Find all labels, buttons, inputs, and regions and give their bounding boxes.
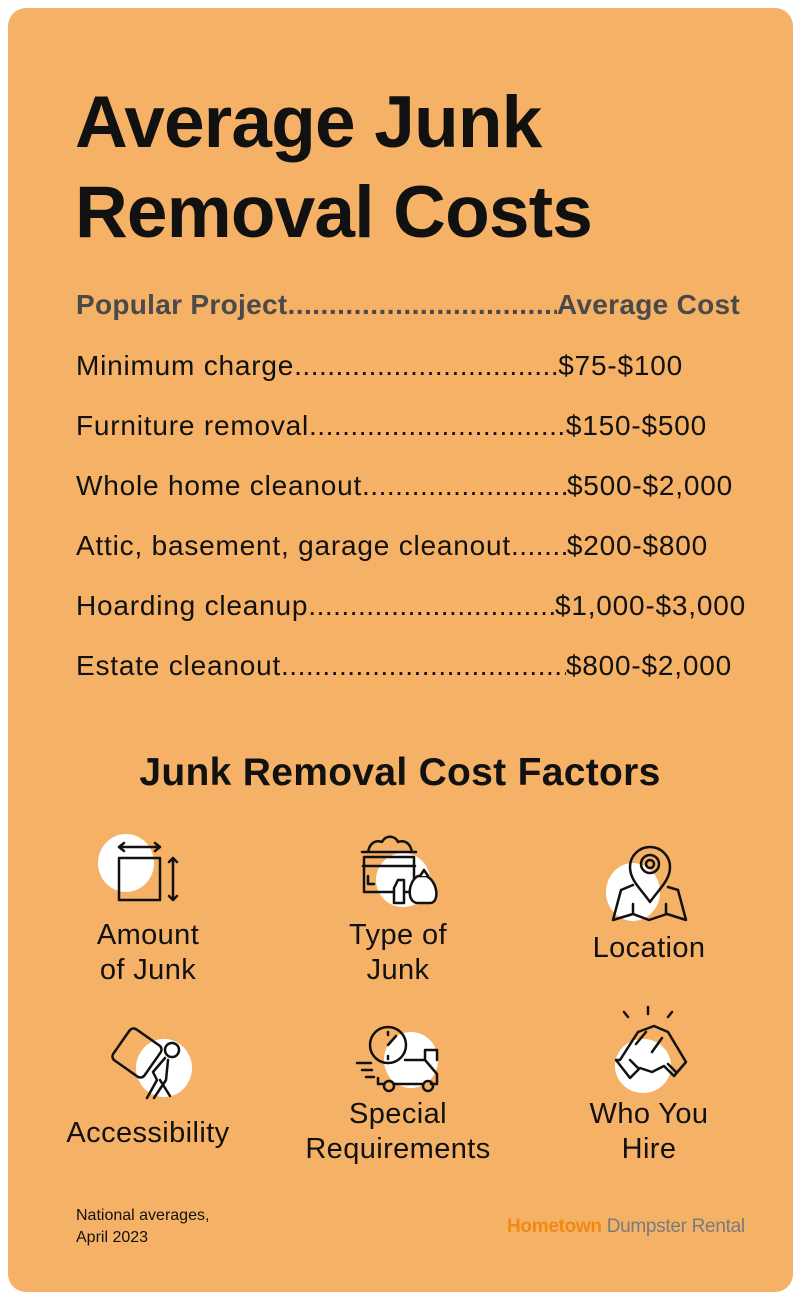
label: who you hire	[590, 1098, 708, 1165]
label: who you hire: Hire	[622, 1133, 676, 1165]
title: Average Junk	[75, 82, 541, 163]
label: location: Location	[593, 932, 705, 964]
label: type of junk: Type of	[349, 919, 447, 951]
label: accessibility: Accessibility	[66, 1117, 230, 1149]
row: furniture removal: Furniture removal	[76, 410, 309, 441]
label: special requirements: Requirements	[305, 1133, 491, 1165]
logo: Hometown Dumpster Rental	[507, 1216, 745, 1237]
label: amount of junk: of Junk	[100, 954, 196, 986]
section heading: Junk Removal Cost Factors	[139, 751, 661, 794]
row: estate: Estate cleanout	[76, 650, 281, 681]
label: amount of junk	[97, 919, 199, 986]
label: special requirements: Special	[349, 1098, 447, 1130]
label: special requirements	[305, 1098, 491, 1165]
row: estate: $800-$2,000	[566, 650, 732, 681]
table header: Popular Project	[76, 289, 287, 320]
label: type of junk: Junk	[367, 954, 429, 986]
icon: amount	[98, 834, 177, 900]
row: hoarding: Hoarding cleanup	[76, 590, 308, 621]
row: minimum charge: Minimum charge	[76, 350, 294, 381]
title: Removal Costs	[75, 172, 592, 253]
label: amount of junk: Amount	[97, 919, 199, 951]
row: minimum charge: $75-$100	[558, 350, 683, 381]
footnote	[76, 1207, 209, 1246]
row: furniture removal: $150-$500	[566, 410, 707, 441]
footnote: National averages,	[76, 1207, 209, 1224]
label: type of junk	[349, 919, 447, 986]
row: attic: $200-$800	[567, 530, 708, 561]
icon: special requirements	[357, 1027, 438, 1091]
row: hoarding: $1,000-$3,000	[555, 590, 746, 621]
row: attic: Attic, basement, garage cleanout	[76, 530, 511, 561]
cost table	[76, 289, 746, 681]
table header	[76, 289, 740, 320]
table header: Average Cost	[557, 289, 740, 320]
title	[75, 82, 592, 253]
row: attic	[76, 530, 708, 561]
row: whole home: $500-$2,000	[567, 470, 733, 501]
footnote: April 2023	[76, 1229, 148, 1246]
label: who you hire: Who You	[590, 1098, 708, 1130]
row: whole home	[76, 470, 733, 501]
row: minimum charge	[76, 350, 683, 381]
row: estate	[76, 650, 732, 681]
row: whole home: Whole home cleanout	[76, 470, 362, 501]
row: furniture removal	[76, 410, 707, 441]
row: hoarding	[76, 590, 746, 621]
icon: location	[606, 847, 686, 921]
icon: accessibility	[111, 1027, 192, 1098]
icon: type	[362, 837, 436, 907]
icon: who you hire	[615, 1007, 686, 1093]
